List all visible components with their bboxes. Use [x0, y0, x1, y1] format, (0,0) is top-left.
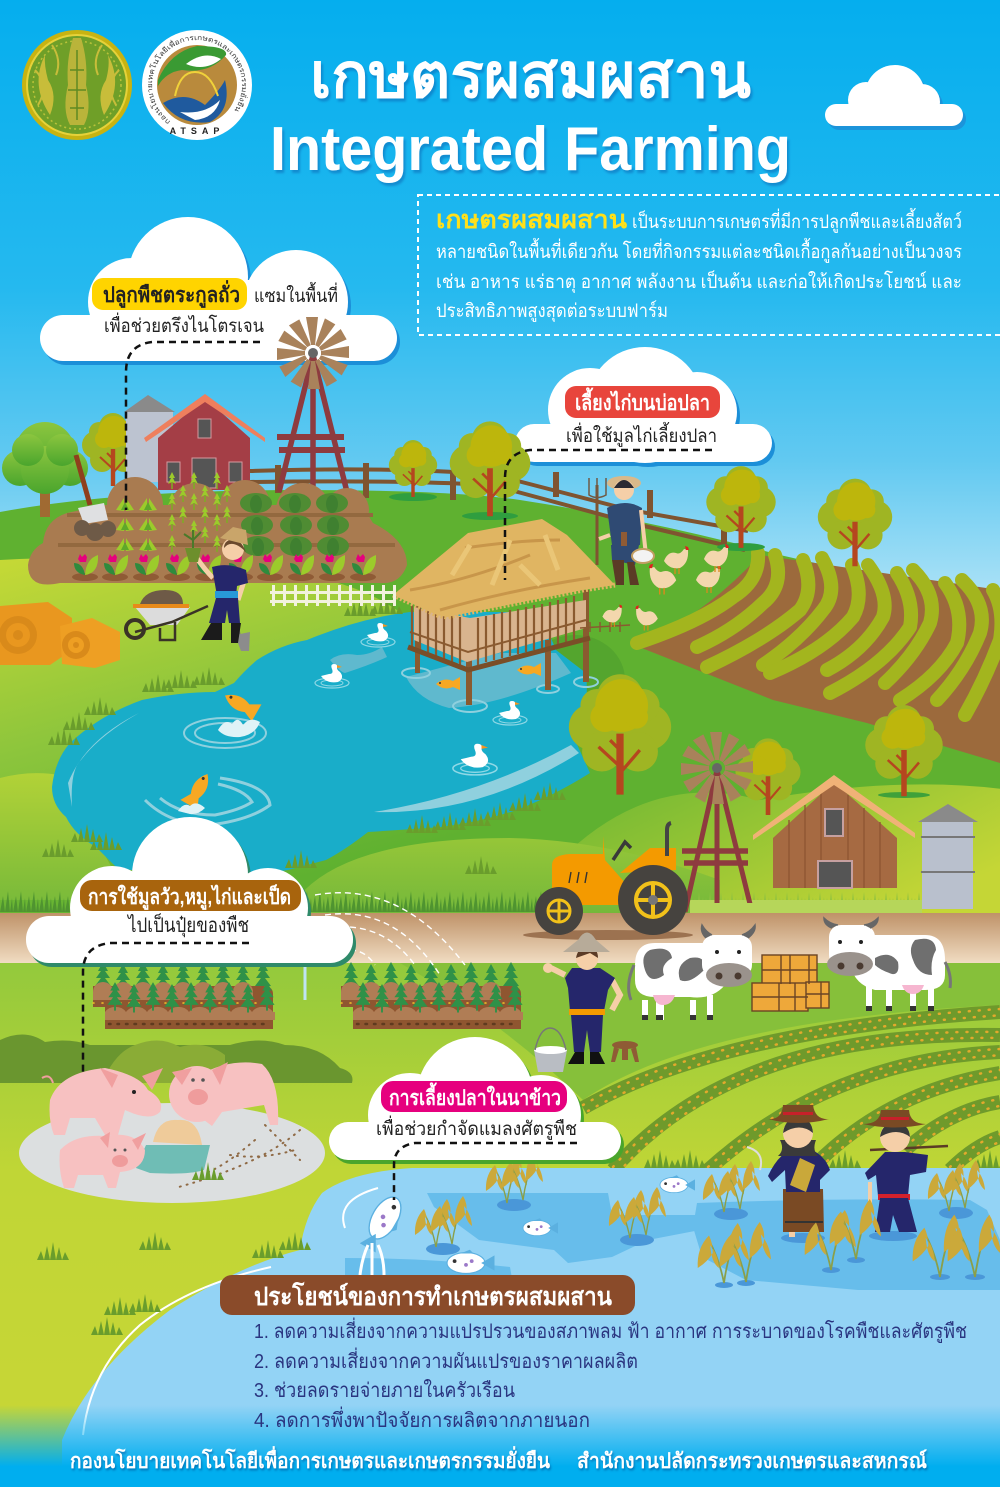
tractor	[523, 823, 693, 940]
white stroke shore	[83, 1188, 378, 1435]
tree: behind barn	[82, 413, 144, 485]
callout: fish in paddy cloud: เพื่อช่วยกำจัดแมลงศัตรูพืช	[376, 1115, 577, 1140]
pond ripples	[145, 668, 598, 825]
pond	[52, 612, 590, 877]
hut on stilts	[393, 519, 630, 705]
pond highlights	[68, 713, 579, 812]
grass strip above road	[0, 889, 922, 915]
intro text box: ประสิทธิภาพสูงสุดต่อระบบฟาร์ม	[436, 300, 668, 323]
wheelbarrow	[126, 590, 208, 640]
chickens	[602, 544, 729, 630]
benefits list	[254, 1317, 967, 1432]
footer	[70, 1445, 927, 1473]
water patches	[345, 1193, 1000, 1290]
crops	[116, 472, 349, 556]
woman farmer	[747, 1105, 830, 1243]
bottom fade	[0, 1405, 1000, 1487]
white picket fence	[270, 585, 396, 606]
stool	[611, 1041, 639, 1062]
bushes	[0, 1034, 352, 1083]
callout: chicken cloud: เลี้ยงไก่บนบ่อปลา	[575, 387, 710, 415]
cow right	[824, 918, 950, 1011]
feed tub	[136, 1120, 224, 1180]
road	[0, 913, 1000, 963]
footer: กองนโยบายเทคโนโลยีเพื่อการเกษตรและเกษตรกรรมยั่งยืน	[70, 1445, 551, 1473]
ducks	[315, 623, 527, 775]
pig left	[42, 1068, 163, 1135]
shovel and soil heap	[74, 455, 116, 541]
pig small	[60, 1132, 146, 1188]
pond grass	[42, 596, 566, 874]
trees back row	[389, 440, 437, 501]
background sky	[0, 0, 1000, 640]
rice plants	[415, 1152, 985, 1255]
barn brown	[753, 775, 915, 888]
logo: ATSAP: ATSAP	[170, 126, 224, 136]
pond shade on grass	[525, 635, 625, 725]
farmer with shovel	[184, 527, 250, 651]
fish in pond	[178, 663, 541, 814]
benefits list: 3. ช่วยลดรายจ่ายภายในครัวเรือน	[254, 1379, 515, 1402]
intro text box	[418, 195, 1000, 335]
pig mat	[19, 1103, 325, 1203]
crop beds right	[341, 962, 523, 1029]
paddy rows	[583, 1009, 1000, 1173]
intro text box: เกษตรผสมผสาน	[436, 206, 627, 234]
callout: chicken cloud	[515, 347, 772, 463]
barn red	[144, 394, 265, 490]
milk bucket	[534, 1028, 567, 1072]
title: Integrated Farming	[270, 115, 791, 184]
callout: fish in paddy cloud: การเลี้ยงปลาในนาข้าว	[389, 1082, 561, 1110]
right green band	[400, 963, 1000, 1100]
barn grass base	[700, 903, 922, 913]
leader lines	[83, 342, 712, 1200]
silo right	[918, 804, 978, 909]
title	[270, 42, 791, 184]
man farmer	[863, 1110, 948, 1241]
feed dots	[175, 1125, 300, 1188]
left lawn	[0, 558, 460, 915]
fish and splash	[357, 1175, 695, 1275]
crop beds left	[93, 962, 275, 1029]
cow left	[629, 925, 755, 1020]
soil beds	[28, 477, 407, 585]
callout: legumes cloud: ปลูกพืชตระกูลถั่ว	[103, 279, 240, 309]
mid trees	[569, 674, 671, 793]
rice plants front	[698, 1199, 1000, 1288]
callout: fish in paddy cloud	[329, 1037, 621, 1160]
benefits heading: ประโยชน์ของการทำเกษตรผสมผสาน	[254, 1281, 612, 1311]
silo left	[124, 395, 175, 482]
callout: chicken cloud: เพื่อใช้มูลไก่เลี้ยงปลา	[566, 422, 717, 447]
benefits list: 2. ลดความเสี่ยงจากความผันแปรของราคาผลผลิต	[254, 1347, 638, 1373]
sprinkler	[305, 893, 465, 1000]
farmer with pitchfork	[589, 476, 654, 585]
callout: manure cloud	[26, 817, 353, 963]
pond reflections	[330, 647, 571, 708]
fence	[250, 463, 748, 550]
callout: legumes cloud	[40, 217, 397, 361]
tree: big green	[2, 422, 88, 517]
windmill right	[681, 732, 753, 912]
benefits list: 4. ลดการพึ่งพาปัจจัยการผลิตจากภายนอก	[254, 1406, 590, 1432]
lower field	[0, 963, 1000, 1487]
farmer thumbs up	[543, 932, 620, 1064]
callout: legumes cloud: เพื่อช่วยตรึงไนโตรเจน	[104, 312, 264, 337]
shore grass	[37, 1150, 1000, 1335]
footer: สำนักงานปลัดกระทรวงเกษตรและสหกรณ์	[577, 1449, 927, 1473]
windmill left	[277, 317, 349, 492]
back hill	[0, 490, 1000, 915]
low right hills	[560, 784, 1000, 915]
callout: manure cloud: การใช้มูลวัว,หมู,ไก่และเป็ด	[88, 883, 291, 911]
logo: ministry seal	[22, 30, 132, 140]
lime hills by pond	[0, 773, 720, 915]
hay bales	[0, 602, 120, 668]
field terraces	[634, 553, 1000, 763]
paddy water	[62, 1168, 1000, 1487]
title: เกษตรผสมผสาน	[310, 42, 751, 111]
flower row	[72, 554, 376, 581]
benefits heading	[220, 1275, 635, 1315]
hay stack	[752, 955, 829, 1011]
pig right	[169, 1062, 278, 1126]
callout: manure cloud: ไปเป็นปุ๋ยของพืช	[126, 912, 249, 938]
cloud: top right	[825, 65, 963, 126]
logo: ATSAP: กองนโยบายเทคโนโลยีเพื่อการเกษตรและเกษตรกรรมยั่งยืน	[148, 36, 248, 124]
callout: legumes cloud: แซมในพื้นที่	[254, 282, 338, 307]
